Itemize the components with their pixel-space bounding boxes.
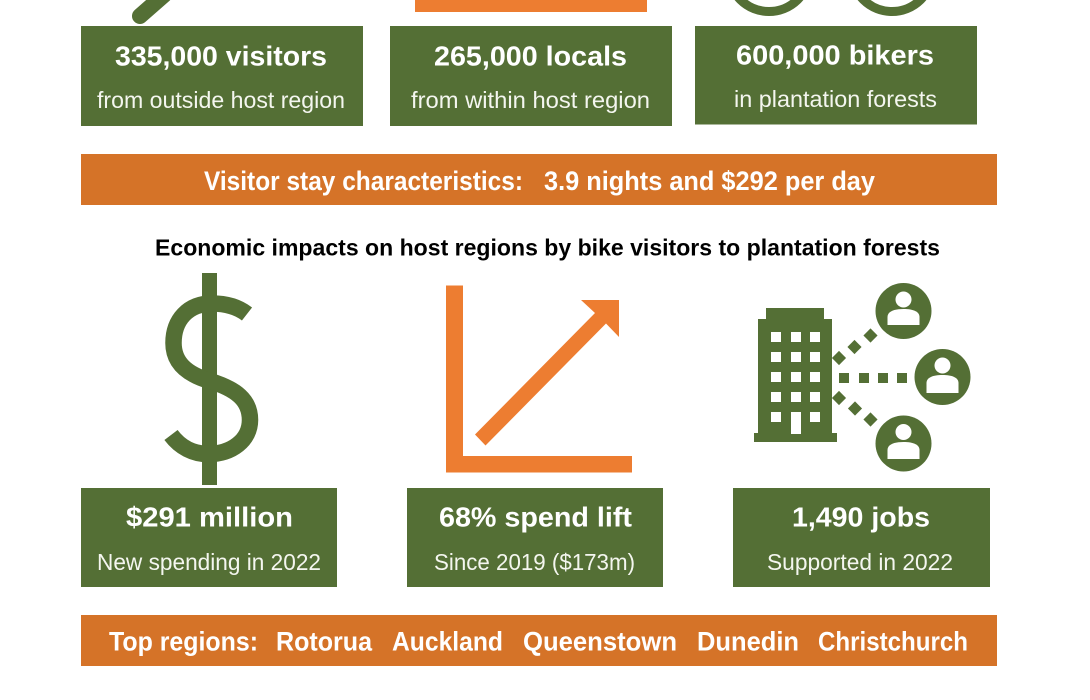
stat: $291 million: $291 million [126, 502, 293, 532]
panel: visitors stat [81, 26, 363, 126]
caption: supported in 2022: Supported in 2022 [767, 549, 953, 575]
banner: visitor stay characteristics: Visitor stay characteristics: [204, 166, 523, 196]
icon: building connected to people [754, 283, 970, 472]
icon: cropped visitor bike fragment [140, 0, 164, 16]
banner: top regions: Top regions: [109, 626, 258, 656]
person bottom [876, 416, 932, 472]
dotted connectors [832, 328, 907, 427]
person top [876, 283, 932, 339]
building [754, 308, 837, 442]
panel: spend lift stat [407, 488, 663, 587]
stat: 335,000 visitors: 335,000 visitors [115, 40, 327, 72]
banner: top regions: Christchurch [818, 626, 968, 656]
banner: top regions: Auckland [392, 626, 503, 656]
panel: bikers stat [695, 26, 977, 124]
panel: new spending stat [81, 488, 337, 587]
banner: top regions: Rotorua [276, 626, 372, 656]
caption: in plantation forests: in plantation forests [734, 86, 937, 112]
banner: top regions [81, 615, 997, 666]
person middle [914, 349, 970, 405]
stat: 600,000 bikers: 600,000 bikers [736, 40, 934, 70]
icon: growth chart with arrow [446, 286, 632, 472]
banner: top regions: Dunedin [697, 626, 799, 656]
icon: cropped orange locals base [415, 0, 647, 12]
banner: top regions: Queenstown [523, 626, 677, 656]
stat: 1,490 jobs: 1,490 jobs [792, 502, 930, 532]
caption: new spending in 2022: New spending in 2022 [97, 549, 321, 575]
caption: from within host region: from within host region [411, 87, 650, 113]
caption: from outside host region: from outside host region [97, 87, 345, 113]
panel: locals stat [390, 26, 672, 126]
panel: jobs stat [733, 488, 990, 587]
icon: dollar sign [171, 273, 250, 485]
caption: since 2019: Since 2019 ($173m) [434, 549, 635, 575]
banner: visitor stay characteristics: 3.9 nights and $292 per day [544, 166, 875, 196]
icon: cropped bike wheels [728, 0, 932, 12]
stat: 68% spend lift: 68% spend lift [439, 502, 632, 532]
heading: economic impacts: Economic impacts on host regions by bike visitors to plantation forests [155, 234, 940, 260]
stat: 265,000 locals: 265,000 locals [434, 40, 627, 72]
banner: visitor stay characteristics [81, 154, 997, 205]
